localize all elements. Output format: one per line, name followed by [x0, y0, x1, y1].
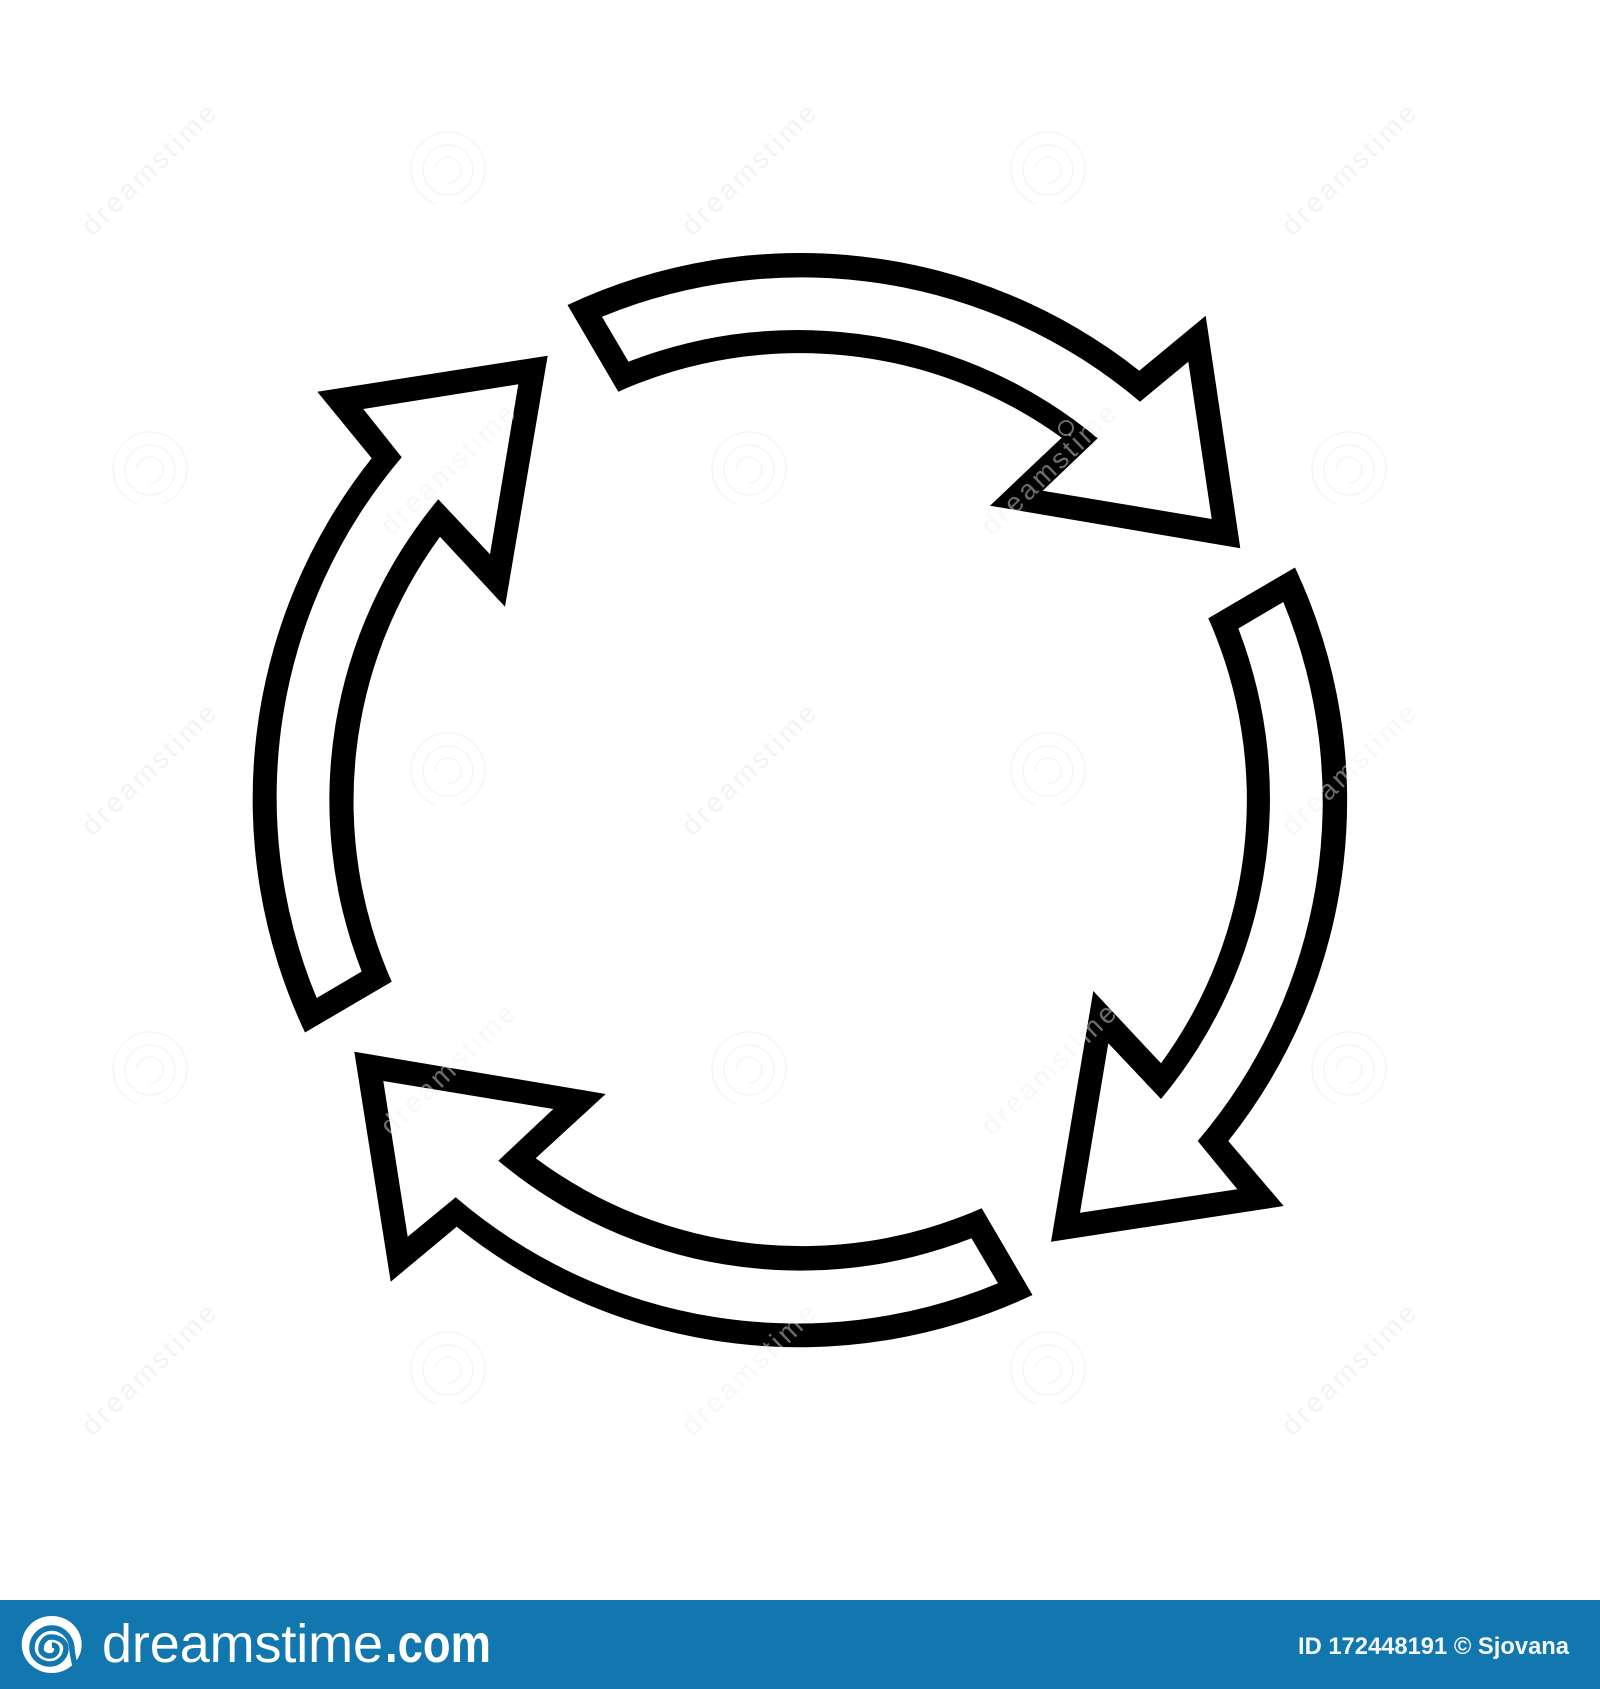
- watermark text over arrows: dreamstime: [975, 397, 1122, 541]
- watermark text on white: dreamstime: [1275, 697, 1422, 841]
- watermark text on white: dreamstime: [1275, 1297, 1422, 1441]
- watermark text over arrows: dreamstime: [374, 997, 521, 1141]
- icon: spiral logo: [22, 1616, 82, 1676]
- arrow: bottom right: [1051, 568, 1347, 1242]
- footer band: [0, 1600, 1600, 1689]
- watermark text on white: dreamstime: [75, 97, 222, 241]
- arrow: bottom left: [354, 1052, 1032, 1347]
- watermark text over arrows: [374, 397, 1422, 1441]
- brand name: .com: [385, 1614, 491, 1674]
- watermark text on white: dreamstime: [675, 1297, 822, 1441]
- brand name: dreamstime: [102, 1614, 383, 1674]
- arrow: top left: [253, 356, 548, 1032]
- watermark text over arrows: dreamstime: [675, 1297, 822, 1441]
- watermark text on white: dreamstime: [975, 997, 1122, 1141]
- watermark text on white: dreamstime: [675, 97, 822, 241]
- watermark text on white: dreamstime: [374, 397, 521, 541]
- watermark text on white: dreamstime: [1275, 97, 1422, 241]
- image id and credit: ID 172448191 © Sjovana: [1298, 1633, 1570, 1660]
- watermark text on white: dreamstime: [675, 697, 822, 841]
- watermark text on white: dreamstime: [975, 397, 1122, 541]
- watermark text on white: dreamstime: [374, 997, 521, 1141]
- watermark text over arrows: dreamstime: [1275, 697, 1422, 841]
- watermark text on white: dreamstime: [75, 697, 222, 841]
- watermark text over arrows: dreamstime: [374, 397, 521, 541]
- watermark text on white: [75, 97, 1422, 1441]
- arrow: top right: [568, 253, 1240, 548]
- watermark text over arrows: dreamstime: [975, 997, 1122, 1141]
- watermark spirals: [113, 132, 1386, 1404]
- watermark text on white: dreamstime: [75, 1297, 222, 1441]
